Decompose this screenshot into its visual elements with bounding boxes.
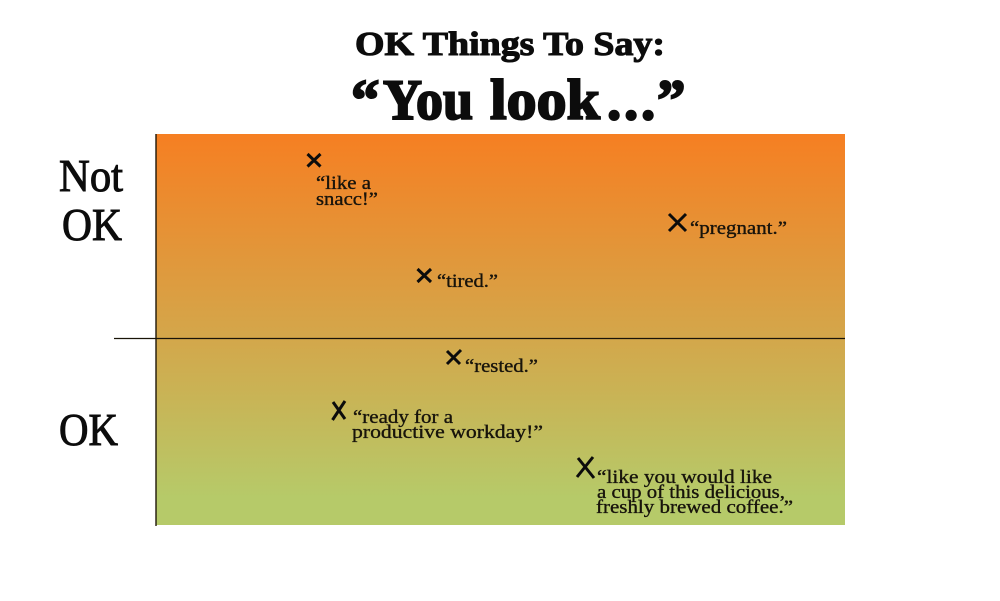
axis label: Not OK: OK bbox=[62, 199, 122, 250]
heading: OK Things To Say: OK Things To Say: bbox=[355, 26, 665, 63]
axis: vertical bbox=[155, 134, 157, 526]
data point: like a snacc bbox=[308, 154, 378, 210]
heading: You look: . bbox=[607, 69, 621, 132]
data point: ready for a productive workday bbox=[332, 401, 543, 443]
heading: You look: “ bbox=[351, 69, 380, 132]
data point: like you would like a cup of coffee bbox=[577, 457, 793, 518]
axis label: OK: OK bbox=[59, 404, 118, 455]
heading: You look: look bbox=[490, 69, 600, 132]
data point: like a snacc: “like a bbox=[316, 173, 372, 194]
chart panel: gradient background bbox=[156, 134, 845, 525]
title bbox=[351, 26, 686, 132]
heading: You look: ” bbox=[657, 69, 686, 132]
heading: You look: . bbox=[624, 69, 638, 132]
data point: tired: “tired.” bbox=[437, 271, 498, 292]
data point: like you would like a cup of coffee: freshly brewed coffee.” bbox=[596, 497, 793, 518]
data point: ready for a productive workday: productive workday!” bbox=[352, 422, 543, 443]
heading: You look: . bbox=[641, 69, 655, 132]
data point: rested: “rested.” bbox=[465, 356, 538, 377]
data point: tired bbox=[418, 269, 498, 292]
axis label: Not OK bbox=[59, 150, 123, 250]
data point: like a snacc: snacc!” bbox=[316, 189, 378, 210]
data point: pregnant bbox=[669, 214, 787, 239]
data point: like you would like a cup of coffee: a cup of this delicious, bbox=[597, 482, 785, 503]
heading: You look: You bbox=[383, 69, 473, 132]
axis: horizontal divider bbox=[114, 338, 845, 340]
data point: ready for a productive workday: “ready for a bbox=[353, 407, 454, 428]
data point: like you would like a cup of coffee: “like you would like bbox=[597, 467, 772, 488]
data point: pregnant: “pregnant.” bbox=[690, 218, 787, 239]
axis label: Not OK: Not bbox=[59, 150, 123, 201]
data point: rested bbox=[447, 350, 538, 377]
